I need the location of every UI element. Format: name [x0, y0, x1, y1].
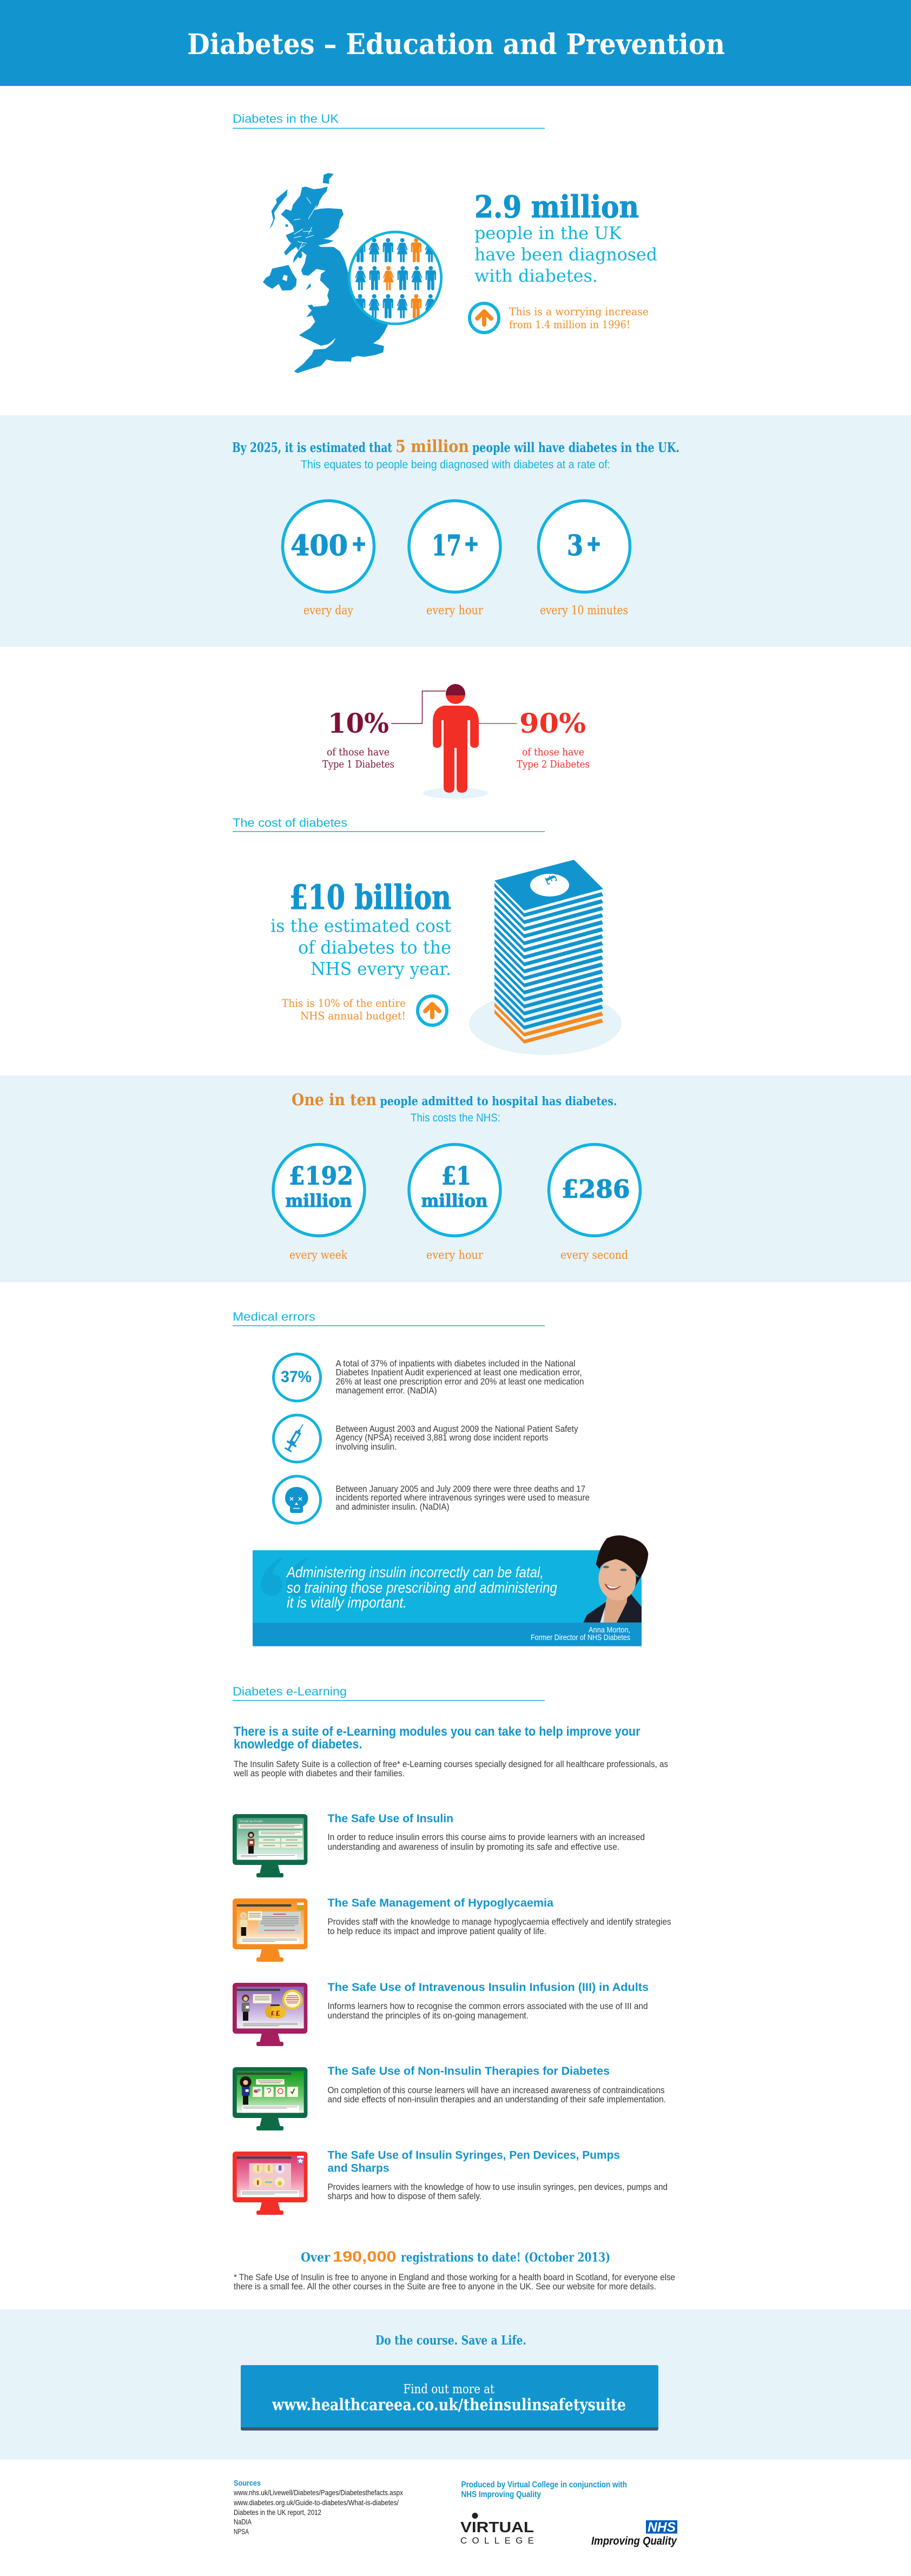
text: syringe incidents: incidents reported where intravenous syringes were used to measure: [335, 1493, 590, 1503]
course: safe use of insulin: understanding and awareness of insulin by promoting its safe and effective use.: [328, 1842, 619, 1852]
stat circle: 1 million: £1: [441, 1161, 471, 1191]
attribution: [531, 1626, 630, 1642]
stat circle: 192 million: £192: [289, 1161, 353, 1191]
section heading: Diabetes e-Learning: [233, 1685, 347, 1698]
intro heading: There is a suite of e-Learning modules you can take to help improve your: [234, 1724, 641, 1739]
footer: [233, 2479, 677, 2547]
stat circle: 1 million: million: [421, 1190, 488, 1211]
monitor: safe use of insulin: The safe use of insulin: [239, 1820, 263, 1823]
icon: 37 percent: [274, 1354, 320, 1401]
logo: Virtual College: VIRTUAL: [460, 2519, 534, 2535]
stat: 90%: of those have: [522, 746, 584, 758]
credit: [461, 2480, 627, 2499]
section: medical errors: [233, 1310, 648, 1646]
panel: one in ten: [0, 1075, 911, 1282]
text: wrong dose reports: Agency (NPSA) received 3,881 wrong dose incident reports: [335, 1433, 549, 1443]
people icons: [355, 238, 436, 318]
map of UK: [263, 173, 388, 373]
logo: NHS Improving Quality: Improving Quality: [591, 2535, 677, 2547]
stat circle: 17+ every hour: [409, 501, 500, 618]
text: syringe incidents: and administer insulin. (NaDIA): [335, 1502, 449, 1512]
logo: Virtual College: [460, 2513, 534, 2546]
panel: 2025 estimate: [0, 415, 911, 647]
credit: Produced by Virtual College in conjunction with: [461, 2480, 627, 2489]
intro paragraph: The Insulin Safety Suite is a collection of free* e-Learning courses specially designed for all healthcare professionals, as: [234, 1759, 668, 1769]
text: inpatient audit: [335, 1359, 584, 1396]
sources: www.nhs.uk/Livewell/Diabetes/Pages/Diabetesthefacts.aspx: [233, 2488, 403, 2497]
illustration: stack of banknotes: [469, 860, 622, 1055]
stat circle: 400+ every day: every day: [303, 604, 353, 618]
course: hypoglycaemia: to help reduce its impact and improve patient quality of life.: [328, 1926, 546, 1936]
course: intravenous insulin infusion: The Safe Use of Intravenous Insulin Infusion (III) in Adults: [328, 1981, 649, 1994]
stat circle: 286: [549, 1144, 641, 1262]
sources: Diabetes in the UK report, 2012: [234, 2508, 321, 2517]
monitor: hypoglycaemia: [233, 1898, 307, 1962]
sources: NaDIA: [234, 2518, 252, 2526]
course: intravenous insulin infusion: Informs learners how to recognise the common errors associated with the use of III and: [328, 2001, 648, 2011]
course: hypoglycaemia: The Safe Management of Hypoglycaemia: [328, 1897, 553, 1909]
monitor: syringes pen devices pumps: [233, 2152, 307, 2215]
course: intravenous insulin infusion: [328, 1981, 649, 2021]
headline: One in ten: [292, 1091, 377, 1110]
stat circle: 192 million: every week: [289, 1249, 347, 1262]
UK map with magnified people: [263, 173, 441, 373]
icon: up arrow: [470, 303, 499, 333]
text: inpatient audit: A total of 37% of inpatients with diabetes included in the National: [335, 1359, 576, 1369]
stat: 90%: Type 2 Diabetes: [517, 758, 590, 770]
stat circle: 3+ every 10 minutes: +: [587, 529, 600, 559]
course: safe use of insulin: The Safe Use of Insulin: [328, 1813, 453, 1825]
button: www.healthcareea.co.uk/theinsulinsafetysuite: [272, 2395, 626, 2415]
stat: 10 billion: NHS every year.: [311, 958, 451, 979]
text: wrong dose reports: Between August 2003 and August 2009 the National Patient Safety: [335, 1424, 578, 1434]
stat: 10%: [322, 707, 394, 770]
monitor: intravenous insulin infusion: [233, 1983, 307, 2046]
stat: 2.9 million: 2.9 million: [474, 189, 639, 225]
course: syringes pen devices pumps: The Safe Use of Insulin Syringes, Pen Devices, Pumps: [328, 2149, 620, 2162]
quote text: it is vitally important.: [287, 1594, 407, 1611]
footnote: * The Safe Use of Insulin is free to anyone in England and those working for a health board in Scotland, for everyone else: [234, 2272, 675, 2282]
text: syringe incidents: [335, 1484, 590, 1512]
course: non-insulin therapies: and side effects of non-insulin therapies and an understanding of their safe implementation.: [328, 2094, 666, 2104]
attribution: Anna Morton,: [589, 1626, 630, 1635]
stat circle: 400+ every day: 400: [291, 529, 348, 562]
icon: up arrow: [418, 996, 447, 1025]
quote text: [286, 1564, 557, 1611]
course: non-insulin therapies: The Safe Use of Non-Insulin Therapies for Diabetes: [328, 2065, 610, 2077]
stat: 10 billion: of diabetes to the: [298, 937, 451, 958]
panel: call to action: [0, 2309, 911, 2459]
stat circle: 400+ every day: +: [352, 529, 366, 559]
credit: NHS Improving Quality: [461, 2490, 541, 2499]
section: diabetes in the UK: [233, 112, 657, 373]
course: syringes pen devices pumps: Provides learners with the knowledge of how to use insulin syringes, pen devices, pumps and: [328, 2182, 668, 2192]
stat circle: 286: every second: [560, 1249, 628, 1262]
stat circle: 17+ every hour: +: [465, 529, 478, 559]
stat: 2.9 million: have been diagnosed: [474, 244, 657, 265]
logo: NHS Improving Quality: [591, 2520, 677, 2547]
course: non-insulin therapies: On completion of this course learners will have an increased awareness of contraindications: [328, 2085, 664, 2095]
intro heading: [234, 1724, 641, 1752]
stat: 10 billion: is the estimated cost: [270, 915, 451, 937]
course: non-insulin therapies: [328, 2065, 666, 2104]
stat: 10 billion: [270, 878, 451, 979]
stat: registrations: registrations to date! (October 2013): [401, 2250, 610, 2265]
stat circle: 400+ every day: [282, 501, 374, 618]
quote text: Administering insulin incorrectly can be fatal,: [286, 1564, 544, 1581]
headline: 5 million: [395, 437, 469, 456]
panel: type 1 and type 2 split: [322, 684, 590, 799]
note: worrying increase: [509, 305, 649, 331]
text: inpatient audit: management error. (NaDIA): [335, 1386, 437, 1396]
button: [241, 2365, 658, 2431]
text: wrong dose reports: [335, 1424, 578, 1452]
stat circle: 17+ every hour: 17: [432, 529, 461, 562]
sources: NPSA: [234, 2527, 249, 2536]
note: worrying increase: This is a worrying increase: [509, 305, 649, 318]
stat circle: 192 million: million: [286, 1190, 352, 1211]
sources: [233, 2479, 403, 2536]
stat: registrations: Over: [301, 2250, 331, 2265]
stat circle: 192 million: [273, 1144, 365, 1262]
footnote: there is a small fee. All the other courses in the Suite are free to anyone in the UK. See our website for more details.: [234, 2281, 656, 2292]
callout: quote: [253, 1536, 648, 1646]
stat circle: 17+ every hour: every hour: [426, 604, 483, 618]
stat: 10%: 10%: [328, 707, 389, 739]
sources: www.diabetes.org.uk/Guide-to-diabetes/What-is-diabetes/: [233, 2498, 399, 2507]
course: safe use of insulin: In order to reduce insulin errors this course aims to provide learners with an increased: [328, 1832, 645, 1842]
person icon: [433, 684, 479, 793]
intro heading: knowledge of diabetes.: [234, 1737, 362, 1752]
stat: 2.9 million: [474, 189, 657, 286]
course: hypoglycaemia: Provides staff with the knowledge to manage hypoglycaemia effectively and identify strategies: [328, 1916, 671, 1927]
stat: 90%: 90%: [519, 707, 586, 739]
stat: registrations: 190,000: [333, 2248, 396, 2265]
stat circle: 1 million: [409, 1144, 500, 1262]
stat: registrations: [301, 2248, 610, 2265]
stat: 2.9 million: with diabetes.: [474, 265, 598, 286]
connector: type 2: [479, 723, 517, 724]
note: 10% of budget: NHS annual budget!: [300, 1009, 406, 1022]
button: Find out more at: [404, 2382, 495, 2396]
stat circle: 286: £286: [562, 1174, 630, 1204]
section: cost of diabetes: [233, 816, 622, 1055]
stat: 2.9 million: people in the UK: [474, 223, 622, 243]
course: safe use of insulin: [328, 1813, 645, 1852]
header band: [0, 0, 911, 86]
text: syringe incidents: Between January 2005 and July 2009 there were three deaths and 17: [335, 1484, 585, 1494]
headline: [232, 437, 679, 456]
headline: people admitted to hospital has diabetes.: [380, 1094, 617, 1108]
monitor: intravenous insulin infusion: £: [275, 2009, 280, 2017]
stat: 10 billion: £10 billion: [289, 878, 451, 917]
figure shadow: [423, 788, 488, 799]
section heading: Diabetes in the UK: [233, 112, 339, 125]
icon: 37 percent: 37%: [281, 1368, 312, 1386]
section heading: Medical errors: [233, 1310, 315, 1324]
quote text: so training those prescribing and administering: [287, 1579, 557, 1596]
intro paragraph: [233, 1759, 668, 1778]
stat: 10%: Type 1 Diabetes: [322, 758, 394, 770]
sub heading: This equates to people being diagnosed with diabetes at a rate of:: [301, 459, 610, 471]
course: hypoglycaemia: [328, 1897, 671, 1936]
portrait: [583, 1536, 648, 1623]
stat circle: 3+ every 10 minutes: [539, 501, 630, 618]
text: inpatient audit: Diabetes Inpatient Audit experienced at least one medication error,: [335, 1368, 582, 1378]
stat circle: 1 million: every hour: [426, 1249, 484, 1262]
headline: people will have diabetes in the UK.: [472, 440, 679, 455]
course: syringes pen devices pumps: [328, 2149, 668, 2201]
logo: Virtual College: COLLEGE: [460, 2535, 534, 2546]
stat circle: 3+ every 10 minutes: 3: [567, 529, 583, 562]
magnifier circle: [349, 232, 441, 324]
attribution: Former Director of NHS Diabetes: [531, 1634, 630, 1642]
sub heading: This costs the NHS:: [411, 1112, 500, 1124]
sources: Sources: [234, 2479, 261, 2488]
logo: NHS Improving Quality: NHS: [648, 2520, 676, 2535]
monitor: intravenous insulin infusion: £: [270, 2009, 275, 2017]
monitor: non-insulin therapies: [233, 2067, 307, 2130]
note: 10% of budget: [282, 997, 406, 1022]
connector: type 1: [391, 691, 446, 723]
monitor: safe use of insulin: [233, 1814, 307, 1877]
headline: By 2025, it is estimated that: [232, 440, 392, 455]
call to action heading: Do the course. Save a Life.: [375, 2333, 526, 2348]
headline: [292, 1091, 617, 1110]
course: syringes pen devices pumps: and Sharps: [328, 2162, 390, 2175]
stat circle: 3+ every 10 minutes: every 10 minutes: [540, 604, 628, 618]
illustration: stack of banknotes: £: [541, 872, 560, 887]
icon: skull: [274, 1476, 320, 1523]
course: syringes pen devices pumps: sharps and how to dispose of them safely.: [328, 2191, 481, 2201]
note: 10% of budget: This is 10% of the entire: [282, 997, 406, 1010]
course: intravenous insulin infusion: understand the principles of its on-going management.: [328, 2010, 529, 2021]
intro paragraph: well as people with diabetes and their families.: [233, 1768, 405, 1778]
title: Diabetes – Education and Prevention: [187, 28, 725, 61]
text: wrong dose reports: involving insulin.: [335, 1442, 397, 1452]
footnote: [234, 2272, 675, 2292]
icon: syringe: [274, 1415, 320, 1462]
icon: quote mark: [261, 1557, 308, 1596]
text: inpatient audit: 26% at least one prescription error and 20% at least one medication: [335, 1377, 584, 1386]
stat: 10%: of those have: [327, 746, 390, 758]
section heading: The cost of diabetes: [233, 816, 347, 829]
stat: 90%: [517, 707, 590, 770]
section: diabetes e-learning: [233, 1685, 675, 2292]
note: worrying increase: from 1.4 million in 1996!: [509, 318, 630, 331]
